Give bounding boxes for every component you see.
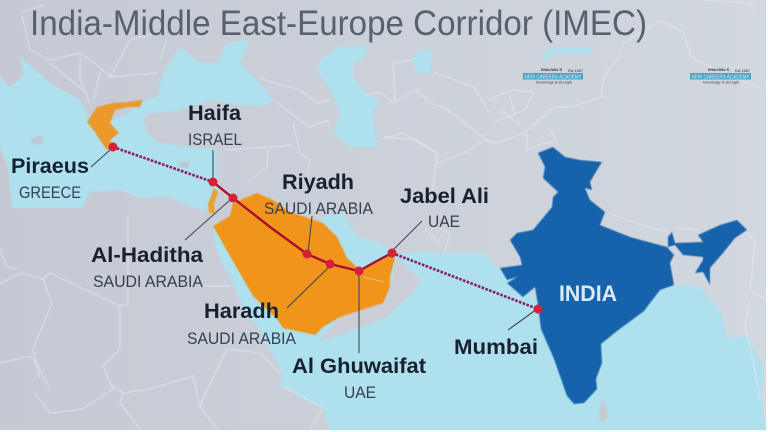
label: INDIA: INDIA xyxy=(559,281,617,306)
watermark logo 2: Est 1967 xyxy=(735,69,750,73)
label: Piraeus xyxy=(11,155,89,202)
label: Al Ghuwaifat: UAE xyxy=(344,383,376,402)
label: Haifa: ISRAEL xyxy=(188,130,242,149)
label: Jabel Ali: UAE xyxy=(428,212,460,231)
map: Sri Lanka xyxy=(599,401,608,423)
watermark logo 1 xyxy=(523,68,583,84)
label: Haifa xyxy=(188,102,242,149)
label: Al-Haditha xyxy=(91,244,204,291)
label: Riyadh: SAUDI ARABIA xyxy=(264,199,374,218)
Israel highlighted xyxy=(208,188,218,214)
route: sea segment Jabel Ali to Mumbai xyxy=(392,253,538,309)
sea: Aral xyxy=(412,50,433,73)
Saudi Arabia and UAE highlighted xyxy=(213,193,395,335)
India highlighted xyxy=(500,147,747,404)
route stops xyxy=(108,142,542,314)
sea: Caspian xyxy=(317,45,380,147)
watermark logo 1: DHALIWAL'S xyxy=(541,68,563,72)
label: Piraeus: GREECE xyxy=(19,183,81,202)
watermark logo 1: Est 1967 xyxy=(568,69,583,73)
watermark logo 2: DHALIWAL'S xyxy=(708,68,730,72)
map: Crete and Cyprus xyxy=(30,136,190,168)
watermark logo 1: knowledge is strength xyxy=(536,80,572,84)
sea: Mediterranean, Aegean and Black Sea xyxy=(0,40,273,212)
watermark logo 2: knowledge is strength xyxy=(703,80,739,84)
map: Oman land xyxy=(318,257,420,342)
leader lines xyxy=(91,150,537,353)
route: land segment Haifa to Jabel Ali xyxy=(213,182,392,271)
label: Riyadh xyxy=(264,171,374,218)
label: Haradh: SAUDI ARABIA xyxy=(187,329,297,348)
label: Haradh xyxy=(187,300,297,348)
label: Al-Haditha: SAUDI ARABIA xyxy=(93,272,204,291)
India mainland xyxy=(500,147,674,404)
route: sea segment Piraeus to Haifa xyxy=(113,147,213,182)
label: Mumbai: Mumbai xyxy=(454,336,538,359)
label: Jabel Ali xyxy=(400,185,489,231)
label: Haradh: Haradh xyxy=(204,300,279,323)
India north-east xyxy=(668,220,747,285)
UAE border xyxy=(363,277,384,282)
Greece highlighted xyxy=(87,100,143,150)
watermark logo 1: NEW CAREERS ACADEMY xyxy=(524,74,582,80)
sea: Red Sea, Persian Gulf, Arabian Sea, Indian Ocean xyxy=(213,213,766,430)
label: Jabel Ali: Jabel Ali xyxy=(400,185,489,208)
label: Haifa: Haifa xyxy=(188,102,241,125)
label: Al Ghuwaifat xyxy=(292,355,426,402)
label: Al Ghuwaifat: Al Ghuwaifat xyxy=(292,355,426,378)
watermark logo 2: NEW CAREERS ACADEMY xyxy=(692,74,750,80)
title: India-Middle East-Europe Corridor (IMEC) xyxy=(30,4,647,43)
watermark logo 2 xyxy=(690,68,751,84)
label: Piraeus: Piraeus xyxy=(11,155,89,178)
label: Riyadh: Riyadh xyxy=(282,171,354,194)
sea: Balkhash xyxy=(541,47,592,62)
label: Al-Haditha: Al-Haditha xyxy=(91,244,203,267)
